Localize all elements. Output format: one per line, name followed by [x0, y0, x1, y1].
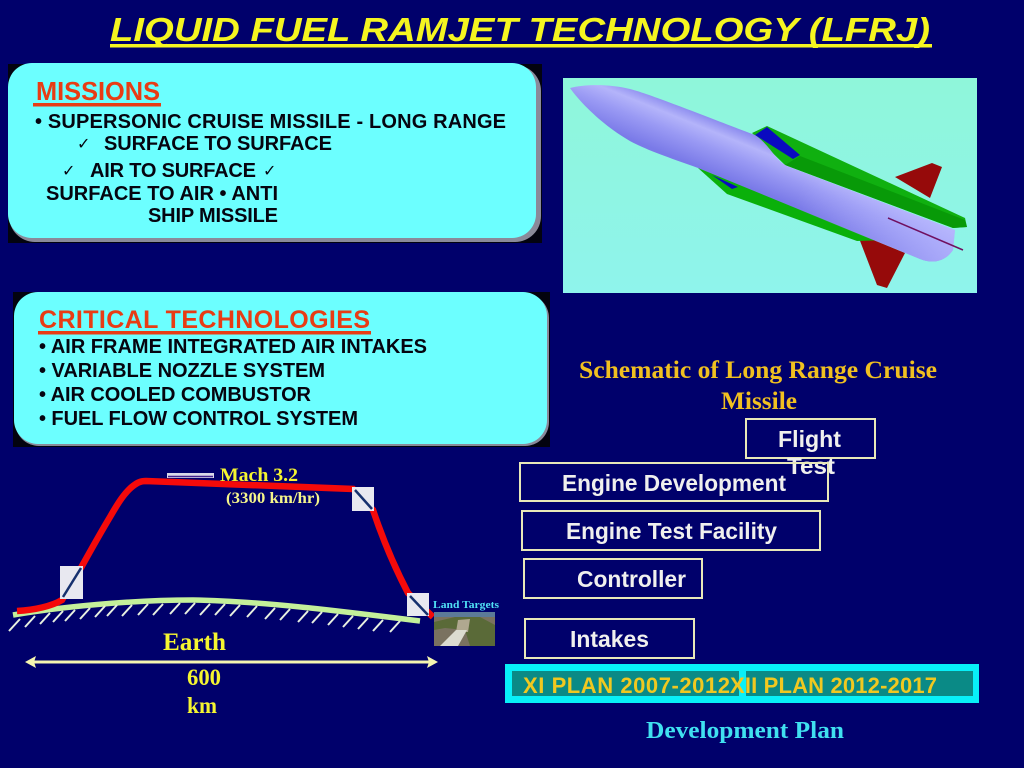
title: LIQUID FUEL RAMJET TECHNOLOGY (LFRJ) — [110, 11, 930, 48]
chart: development plan — [505, 419, 979, 744]
text: technologies list — [39, 336, 427, 430]
missile marker: cruise — [167, 473, 214, 478]
caption: schematic: Schematic of Long Range Cruise — [579, 357, 937, 384]
task: intakes — [525, 619, 694, 658]
task: flight test: Test — [787, 453, 835, 479]
missile marker: descent — [352, 487, 374, 511]
text: missions list: SHIP MISSILE — [148, 205, 278, 227]
text: missions list: ✓ — [62, 161, 75, 180]
text: missions list — [35, 111, 506, 227]
caption: schematic: Missile — [721, 388, 797, 415]
heading: critical technologies: CRITICAL TECHNOLOGIES — [39, 306, 370, 334]
text: missions list: ✓ — [77, 134, 90, 153]
timeline bar: XII PLAN 2012-2017 — [730, 673, 937, 698]
text: technologies list: • FUEL FLOW CONTROL SYSTEM — [39, 408, 358, 430]
label: range — [187, 665, 221, 718]
heading: missions: MISSIONS — [36, 76, 160, 106]
text: technologies list: • AIR FRAME INTEGRATED AIR INTAKES — [39, 336, 427, 358]
ground curve — [13, 600, 420, 621]
task: flight test: Flight — [778, 426, 841, 452]
label: earth: Earth — [163, 629, 226, 656]
icon: upper green intake — [752, 126, 967, 228]
task: controller: Controller — [577, 566, 686, 592]
label: speed: (3300 km/hr) — [226, 490, 320, 507]
text: missions list: • SUPERSONIC CRUISE MISSILE - LONG RANGE — [35, 111, 506, 133]
text: technologies list: • AIR COOLED COMBUSTOR — [39, 384, 312, 406]
label: mach: Mach 3.2 — [220, 465, 298, 486]
caption: schematic — [579, 357, 937, 415]
task: engine development: Engine Development — [562, 470, 786, 496]
chart: trajectory — [9, 465, 500, 718]
arrow: range — [25, 656, 438, 668]
icon: dam photo — [434, 612, 495, 646]
text: missions list: SURFACE TO SURFACE — [104, 133, 332, 155]
trajectory line — [17, 481, 433, 617]
caption: development plan: Development Plan — [646, 718, 844, 744]
text: missions list: ✓ — [263, 161, 276, 180]
icon: upper fin — [895, 163, 942, 198]
icon: lower fin — [857, 233, 905, 288]
task: engine test facility — [522, 511, 820, 550]
task: engine test facility: Engine Test Facility — [566, 518, 777, 544]
missile marker: terminal — [407, 593, 429, 616]
ground hatching — [9, 603, 400, 632]
panel: missions — [8, 63, 542, 243]
timeline bar — [505, 664, 979, 703]
icon: lower green intake — [698, 168, 890, 241]
icon: rear strut line — [888, 218, 963, 250]
task: controller — [524, 559, 702, 598]
icon: missile body — [570, 85, 955, 262]
label: range: km — [187, 693, 217, 718]
missile marker: climb — [60, 566, 83, 599]
task: engine development — [520, 463, 828, 501]
task: flight test — [746, 419, 875, 479]
label: land targets: Land Targets — [433, 599, 500, 611]
text: missions list: AIR TO SURFACE — [90, 160, 256, 182]
task: intakes: Intakes — [570, 626, 649, 652]
panel: critical technologies — [13, 292, 550, 447]
label: range: 600 — [187, 665, 221, 690]
timeline bar: XI PLAN 2007-2012 — [523, 673, 730, 698]
text: technologies list: • VARIABLE NOZZLE SYSTEM — [39, 360, 325, 382]
text: missions list: SURFACE TO AIR • ANTI — [46, 183, 278, 205]
panel: missile image — [563, 78, 977, 293]
